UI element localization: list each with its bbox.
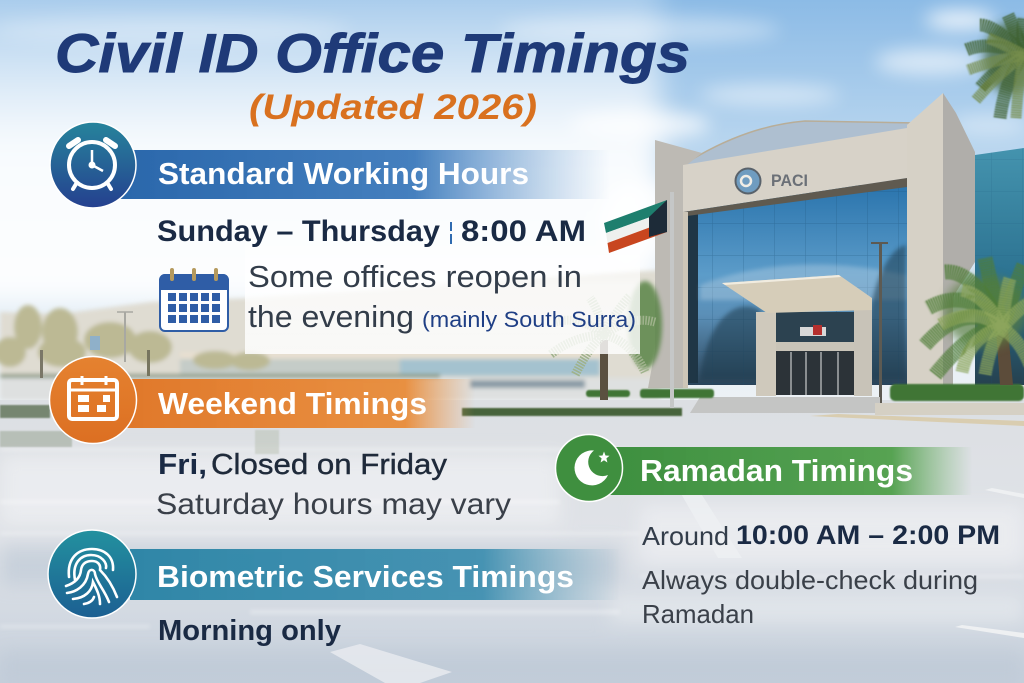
evening note [248,259,636,334]
hours: 8:00 AM [461,215,586,248]
building: PACI headquarters [586,93,1024,415]
morning text: Morning only [158,615,341,647]
hedges [586,384,1024,401]
evening note: the evening [248,299,414,334]
weekend text: Saturday hours may vary [156,488,511,521]
ramadan hours: Ramadan [642,599,754,629]
heading: Ramadan Timings [640,453,913,488]
evening note: Some offices reopen in [248,259,582,294]
palm: left of building [550,296,655,400]
background: white haze on the left sky [0,0,660,305]
icon: fingerprint [48,530,136,618]
weekend text [156,449,511,521]
ramadan hours: 10:00 AM – 2:00 PM [736,520,1000,550]
palm: top right [966,15,1024,118]
banner [125,379,475,428]
hours: Sunday – Thursday [157,215,440,248]
palm: right foreground [925,258,1024,385]
title: Civil ID Office Timings [55,22,690,84]
entrance [722,275,872,396]
panel: biometric services timings [48,530,620,647]
ramadan hours: Around [642,521,729,551]
steps [690,397,880,413]
panel: standard working hours [50,122,636,334]
translucent white panel behind evening note [245,240,640,354]
panel: weekend timings [50,356,511,521]
lamp post [871,242,888,403]
banner [130,549,620,600]
logo [736,168,808,194]
roof arc [683,121,917,210]
icon: alarm clock [50,122,136,208]
background: sky [0,0,1024,420]
heading: Biometric Services Timings [157,559,574,594]
ramadan hours [642,520,1000,629]
icon: crescent and star [556,434,622,502]
evening note: (mainly South Surra) [422,307,636,332]
banner [120,150,610,199]
flag: Kuwait with pole [604,192,674,408]
hours [157,215,586,248]
weekend text: Fri, [158,449,207,481]
right glass wing [975,148,1024,385]
title [55,22,690,127]
left pillar [648,140,702,388]
background: distant buildings and trees [0,270,660,400]
heading: Weekend Timings [158,386,427,421]
tree behind entrance sign [628,281,662,369]
ramadan hours: Always double-check during [642,565,978,595]
logo: PACI [771,171,808,190]
icon: weekend calendar [50,356,136,444]
icon: calendar [160,270,228,331]
panel: ramadan timings [556,434,1000,629]
heading: Standard Working Hours [158,156,529,191]
banner [608,447,972,495]
subtitle: (Updated 2026) [249,88,537,127]
weekend text: Closed on Friday [211,449,448,481]
main glass facade [687,185,907,385]
right pillar [907,93,943,385]
background: pavement [0,400,1024,683]
